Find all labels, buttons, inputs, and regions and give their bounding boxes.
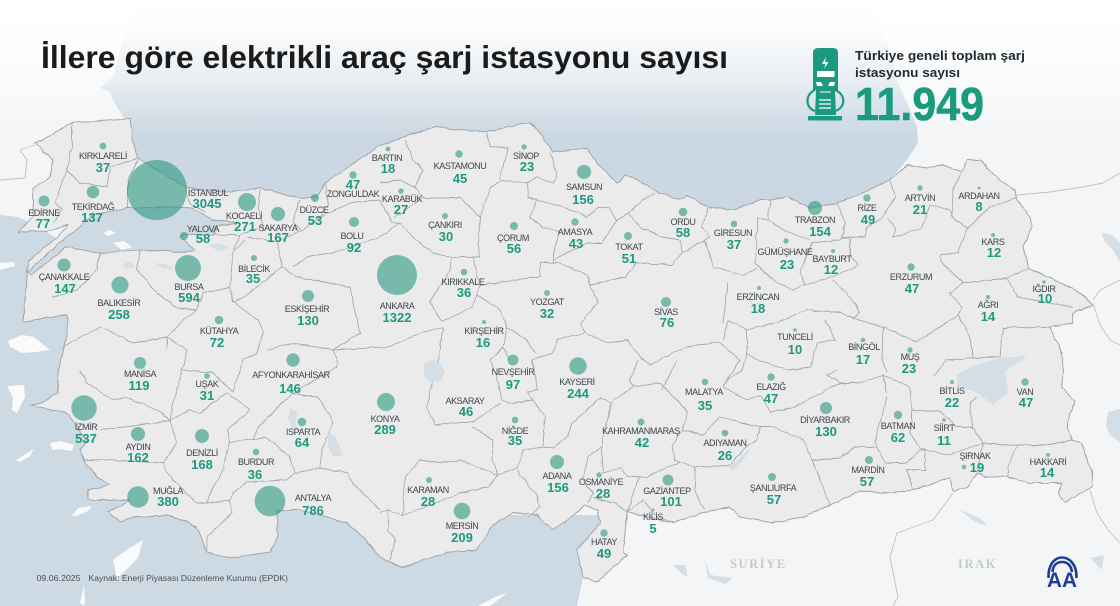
province: Rize (858, 194, 877, 227)
province: Tokat (615, 232, 643, 266)
province: Mersin: 209 (451, 530, 473, 545)
province: Iğdır: 10 (1038, 291, 1052, 306)
province: İzmir: İZMİR (75, 422, 98, 432)
province: Erzincan: 18 (751, 301, 765, 316)
province: Edirne: 77 (36, 216, 50, 231)
province: Nevşehir: 97 (506, 377, 520, 392)
province: Ağrı: 14 (981, 309, 996, 324)
province: Eskişehir: ESKİŞEHİR (285, 304, 330, 314)
province: Kocaeli: KOCAELİ (226, 211, 262, 221)
province: Erzurum: ERZURUM (890, 272, 932, 282)
province: Ankara (377, 255, 417, 325)
province: Kastamonu (434, 150, 486, 186)
province: Tunceli: 10 (788, 342, 802, 357)
province: Elazığ: ELAZIĞ (756, 382, 786, 392)
province: Niğde (502, 417, 529, 448)
province: Konya: 289 (374, 422, 396, 437)
province: İzmir: 537 (75, 431, 97, 446)
province: Batman: BATMAN (881, 421, 915, 431)
province: Ardahan: 8 (975, 199, 983, 214)
province: Gümüşhane (758, 238, 813, 272)
province: Ağrı: AĞRI (978, 300, 998, 310)
province: Ağrı (978, 295, 998, 324)
province: Ordu: ORDU (671, 217, 695, 227)
province: Yalova: YALOVA (187, 224, 220, 234)
province: Bolu: BOLU (341, 231, 363, 241)
province: Erzincan: ERZİNCAN (737, 292, 779, 302)
province: Bursa (174, 255, 204, 305)
province: Bartın: BARTIN (372, 153, 402, 163)
province: Hakkari: HAKKARİ (1030, 457, 1066, 467)
province: Malatya: 35 (698, 398, 712, 413)
province: Trabzon (795, 201, 835, 239)
province: Diyarbakır (800, 402, 851, 439)
province: Yalova (180, 224, 220, 246)
province: Kayseri: KAYSERİ (559, 377, 595, 387)
province: Yalova: 58 (196, 231, 210, 246)
province: Karaman (407, 477, 449, 509)
province: Yozgat (530, 290, 565, 321)
icon: Anadolu Agency logo (1047, 558, 1077, 592)
province: Mersin: MERSİN (446, 521, 478, 531)
province: İstanbul: 3045 (193, 196, 221, 211)
province: Eskişehir (285, 290, 330, 328)
province: Tokat: 51 (622, 251, 636, 266)
province: Manisa: MANİSA (124, 369, 156, 379)
province: Muş (901, 347, 920, 376)
province: Artvin: ARTVİN (905, 193, 935, 203)
total stat panel (808, 48, 1025, 130)
province: Çorum (497, 222, 529, 256)
province: Aydın (126, 427, 150, 465)
Sea of Marmara (28, 207, 240, 275)
Marmara islands (103, 230, 132, 250)
province: Ordu: 58 (676, 225, 690, 240)
province: Adıyaman: 26 (718, 448, 732, 463)
province: Tokat: TOKAT (615, 242, 643, 252)
province: Muş: MUŞ (901, 352, 920, 362)
province: Karaman: 28 (421, 494, 435, 509)
province: Şanlıurfa: 57 (767, 492, 781, 507)
province: Sinop: SİNOP (513, 151, 539, 161)
province: Tekirdağ: 137 (81, 210, 103, 225)
province: Kilis: KİLİS (643, 512, 663, 522)
province: Siirt (934, 418, 955, 448)
province: Düzce (300, 194, 329, 228)
province: Kırşehir (464, 320, 505, 350)
province: Ardahan: ARDAHAN (958, 191, 1000, 201)
province: Bilecik: BİLECİK (238, 264, 270, 274)
province: Samsun: 156 (572, 192, 594, 207)
province: Iğdır: IĞDIR (1032, 284, 1056, 294)
province: Hakkari: 14 (1040, 465, 1055, 480)
province: Afyonkarahisar: 146 (279, 381, 301, 396)
source line: Kaynak: Enerji Piyasası Düzenleme Kurumu (EPDK) (88, 573, 288, 583)
province: Kütahya: KÜTAHYA (200, 326, 239, 336)
province: Zonguldak: ZONGULDAK (327, 189, 380, 199)
province: Çankırı: 30 (439, 229, 453, 244)
province: Sinop (513, 144, 539, 174)
province: Bartın: 18 (381, 161, 395, 176)
province markers (28, 143, 1066, 561)
province: Trabzon: 154 (809, 224, 832, 239)
province: Hakkari (1030, 453, 1066, 480)
province: Bartın (372, 146, 402, 176)
province: Tunceli (777, 328, 813, 357)
province: Balıkesir: BALIKESİR (98, 298, 141, 308)
province: Bolu (341, 217, 363, 255)
province: Niğde: 35 (508, 433, 522, 448)
province: Amasya (558, 218, 593, 251)
province: Giresun: GİRESUN (714, 228, 752, 238)
province: Gümüşhane: 23 (780, 257, 794, 272)
province: Şanlıurfa: ŞANLIURFA (750, 483, 797, 493)
Turkey land (18, 119, 1093, 582)
province: Kırşehir: KIRŞEHİR (464, 326, 505, 336)
province: Afyonkarahisar (252, 353, 331, 396)
province: Adana: 156 (547, 480, 569, 495)
province: Adıyaman: ADIYAMAN (703, 438, 747, 448)
province: Kırşehir: 16 (476, 335, 490, 350)
province: Burdur: BURDUR (238, 457, 275, 467)
province: Muğla: 380 (157, 494, 179, 509)
province: İstanbul (127, 160, 228, 220)
province: Ordu (671, 208, 695, 240)
province: Gaziantep (643, 474, 691, 509)
province: Uşak (196, 373, 219, 403)
province: Trabzon: TRABZON (795, 215, 835, 225)
province: Sivas: SİVAS (654, 307, 678, 317)
province: Şırnak: 19 (970, 460, 984, 475)
province: Bayburt: 12 (824, 262, 838, 277)
province: Samsun (566, 165, 602, 207)
province: Samsun: SAMSUN (566, 182, 602, 192)
province: Giresun: 37 (727, 237, 741, 252)
province: Bolu: 92 (347, 240, 361, 255)
province: Kırıkkale: 36 (457, 285, 471, 300)
stat label: istasyonu sayısı (855, 65, 960, 80)
province: Bitlis (939, 380, 965, 410)
province: Düzce: 53 (308, 213, 322, 228)
province: Artvin (905, 185, 935, 217)
province: Karabük (382, 188, 423, 217)
province: Aksaray: 46 (459, 404, 473, 419)
province: Uşak: 31 (200, 388, 214, 403)
province: Zonguldak (327, 171, 380, 199)
province: Aksaray: AKSARAY (445, 396, 485, 406)
province: Kırıkkale (442, 269, 485, 300)
province: Şırnak: ŞIRNAK (959, 451, 991, 461)
province: Kırıkkale: KIRIKKALE (442, 277, 485, 287)
province: Kahramanmaraş: KAHRAMANMARAŞ (602, 426, 680, 436)
stat label (855, 48, 1025, 80)
province: Van: 47 (1019, 395, 1033, 410)
province: Bursa: 594 (178, 290, 201, 305)
province: Muğla (127, 486, 183, 509)
province: Çanakkale: 147 (54, 281, 76, 296)
province: Sakarya: 167 (267, 230, 289, 245)
province: Şanlıurfa (750, 473, 797, 507)
province: Amasya: AMASYA (558, 227, 593, 237)
province: Yozgat: 32 (540, 306, 554, 321)
province: Aksaray (445, 396, 485, 419)
province: Hatay: 49 (597, 546, 611, 561)
province: Bitlis: BİTLİS (939, 386, 965, 396)
province: Eskişehir: 130 (297, 313, 319, 328)
province: Batman (881, 411, 915, 445)
province: Siirt: 11 (937, 433, 951, 448)
province: Siirt: SİİRT (934, 423, 955, 433)
country label: Irak: IRAK (958, 557, 997, 571)
province: Kars (982, 233, 1005, 260)
province: Sivas: 76 (660, 315, 674, 330)
icon: EV charging station (808, 48, 843, 120)
stat label: Türkiye geneli toplam şarj (855, 48, 1025, 63)
province: Kahramanmaraş (602, 418, 680, 450)
province: Kocaeli: 271 (234, 219, 256, 234)
icon: Anadolu Agency logo: AA (1047, 569, 1077, 592)
province: Adana (542, 455, 572, 495)
province: Malatya (685, 379, 723, 413)
stat value: 11.949 (855, 78, 984, 130)
province: Adana: ADANA (542, 471, 572, 481)
province: Ankara: ANKARA (380, 301, 415, 311)
source line: 09.06.2025 (36, 573, 81, 583)
province: Gaziantep: 101 (660, 494, 682, 509)
province: İzmir (71, 395, 98, 446)
province: Erzurum: 47 (905, 281, 919, 296)
province: Balıkesir: 258 (108, 307, 130, 322)
province: Amasya: 43 (569, 236, 583, 251)
province: Konya (371, 393, 400, 437)
province: Denizli (186, 429, 218, 472)
province: Nevşehir: NEVŞEHİR (492, 367, 535, 377)
province: Aydın: 162 (127, 450, 149, 465)
neighbouring country borders (0, 145, 1120, 606)
province: Bayburt (813, 249, 852, 277)
province: Çankırı (428, 213, 462, 244)
province: Osmaniye: 28 (596, 486, 610, 501)
province: Bilecik (238, 255, 270, 286)
province: Kırklareli: 37 (96, 160, 110, 175)
province: Burdur (238, 449, 275, 482)
province: Afyonkarahisar: AFYONKARAHİSAR (252, 370, 331, 380)
province: Isparta (286, 418, 320, 450)
province: Çanakkale: ÇANAKKALE (39, 272, 90, 282)
province borders (53, 122, 1073, 560)
province: Hatay (591, 529, 617, 561)
province: Kocaeli (226, 193, 262, 234)
province: Karabük: KARABÜK (382, 194, 423, 204)
province: Van (1017, 378, 1033, 410)
province: Kars: KARS (982, 237, 1005, 247)
province: Rize: 49 (861, 212, 875, 227)
province: Kilis (643, 508, 663, 536)
province: Tunceli: TUNCELİ (777, 332, 813, 342)
province: Mersin (446, 503, 478, 545)
province: Elazığ: 47 (764, 391, 778, 406)
province: Isparta: 64 (295, 435, 310, 450)
title: İllere göre elektrikli araç şarj istasyonu sayısı (41, 39, 728, 75)
province: Çorum: ÇORUM (497, 233, 529, 243)
province: Kastamonu: KASTAMONU (434, 161, 486, 171)
province: Uşak: UŞAK (196, 379, 219, 389)
province: Nevşehir (492, 354, 535, 392)
province: Isparta: ISPARTA (286, 427, 320, 437)
Mediterranean and Aegean Sea (0, 215, 610, 606)
province: Iğdır (1032, 280, 1056, 306)
province: Kayseri: 244 (567, 386, 590, 401)
province: Kütahya: 72 (210, 335, 224, 350)
province: Düzce: DÜZCE (300, 205, 329, 215)
province: Çankırı: ÇANKIRI (428, 220, 462, 230)
province: Osmaniye: OSMANİYE (579, 477, 624, 487)
province: Bingöl: 17 (856, 352, 870, 367)
province: Manisa (124, 357, 156, 393)
province: Karabük: 27 (394, 202, 408, 217)
province: Osmaniye (579, 472, 624, 501)
province: Ardahan (958, 186, 1000, 214)
province: Şırnak (959, 451, 991, 475)
province: Mardin: MARDİN (851, 465, 885, 475)
province: Bilecik: 35 (246, 271, 260, 286)
province: Gümüşhane: GÜMÜŞHANE (758, 247, 813, 257)
province: Sivas (654, 297, 678, 330)
province: Sakarya: SAKARYA (259, 223, 298, 233)
province: Ankara: 1322 (383, 310, 411, 325)
province: Batman: 62 (891, 430, 905, 445)
province: Gaziantep: GAZİANTEP (643, 486, 691, 496)
province: Denizli: DENİZLİ (186, 448, 218, 458)
province: Kastamonu: 45 (453, 171, 467, 186)
province: Tekirdağ (72, 186, 115, 225)
province: Bayburt: BAYBURT (813, 254, 852, 264)
Turkish lakes (122, 243, 1027, 470)
province: Diyarbakır: DİYARBAKIR (800, 415, 851, 425)
province: Yozgat: YOZGAT (530, 297, 565, 307)
province: Malatya: MALATYA (685, 387, 723, 397)
province: Edirne: EDİRNE (28, 208, 60, 218)
province: Kilis: 5 (649, 521, 657, 536)
province: Diyarbakır: 130 (815, 424, 837, 439)
province: Van: VAN (1017, 387, 1033, 397)
province: Bitlis: 22 (945, 395, 959, 410)
province: Antalya: 786 (302, 503, 324, 518)
province: Hatay: HATAY (591, 537, 617, 547)
province: Kırklareli: KIRKLARELİ (79, 151, 127, 161)
province: Manisa: 119 (129, 378, 149, 393)
province: Tekirdağ: TEKİRDAĞ (72, 202, 115, 212)
province: Karaman: KARAMAN (407, 485, 449, 495)
province: Bingöl (848, 338, 880, 367)
province: Balıkesir (98, 276, 141, 322)
province: Kars: 12 (987, 245, 1001, 260)
province: Mardin (851, 456, 885, 489)
province: Konya: KONYA (371, 414, 400, 424)
province: Erzurum (890, 263, 932, 296)
province: Kahramanmaraş: 42 (635, 435, 649, 450)
province: Bursa: BURSA (174, 282, 204, 292)
province: İstanbul: İSTANBUL (188, 188, 228, 198)
province: Rize: RİZE (858, 203, 877, 213)
province: Niğde: NİĞDE (502, 426, 529, 436)
province: Antalya: ANTALYA (295, 493, 331, 503)
province: Muğla: MUĞLA (153, 486, 183, 496)
province: Edirne (28, 196, 60, 231)
province: Muş: 23 (902, 361, 916, 376)
province: Kırklareli (79, 143, 127, 175)
foreign lakes (673, 233, 1120, 584)
province: Adıyaman (703, 430, 747, 463)
top white haze (0, 0, 1120, 135)
province: Çorum: 56 (507, 241, 521, 256)
province: Giresun (714, 221, 752, 252)
province: Kütahya (200, 316, 239, 350)
province: Zonguldak: 47 (346, 177, 360, 192)
province: Antalya (255, 486, 331, 518)
province: Burdur: 36 (248, 467, 262, 482)
Black Sea (100, 0, 918, 220)
province: Aydın: AYDIN (126, 442, 150, 452)
province: Sinop: 23 (520, 159, 534, 174)
province: Kayseri (559, 357, 595, 401)
province: Mardin: 57 (860, 474, 874, 489)
province: Denizli: 168 (191, 457, 213, 472)
province: Sakarya (259, 207, 298, 245)
province: Bingöl: BİNGÖL (848, 342, 880, 352)
province: Çanakkale (39, 258, 90, 296)
foreign islands (0, 262, 507, 606)
country label: Suriye: SURİYE (730, 557, 787, 571)
province: Erzincan (737, 286, 779, 316)
province: Artvin: 21 (913, 202, 927, 217)
province: Elazığ (756, 373, 786, 406)
